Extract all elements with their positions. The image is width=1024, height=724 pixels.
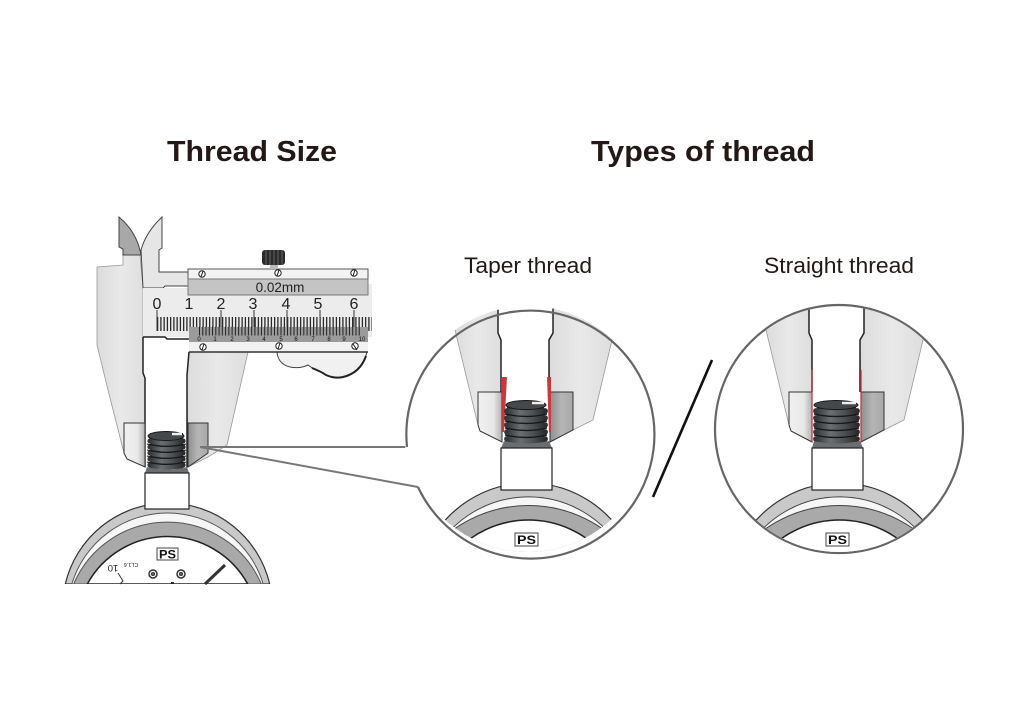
title: Types of thread: Types of thread <box>591 136 815 168</box>
slider bottom plate with vernier: 0 <box>197 337 201 343</box>
divider slash <box>653 360 712 497</box>
caliper upper right jaw <box>141 217 188 288</box>
jaw upper gray facet <box>119 217 141 255</box>
slider bottom plate with vernier: 7 <box>311 337 315 343</box>
straight view contents <box>756 308 924 552</box>
screws <box>199 270 358 350</box>
gauge dial text: 10 <box>108 562 118 573</box>
red straight lines <box>812 370 861 442</box>
blocks <box>789 392 812 442</box>
neck <box>501 448 552 490</box>
right jaw <box>860 305 923 430</box>
caliper sliding jaw <box>187 352 248 467</box>
gauge needles <box>205 565 225 584</box>
main scale numbers: 1 <box>185 296 194 313</box>
magnified view: straight thread <box>715 305 963 553</box>
gauge dial screws <box>149 570 185 578</box>
magnifier outline <box>406 311 654 559</box>
main scale numbers: 4 <box>282 296 291 313</box>
caliper fixed jaw <box>97 255 145 467</box>
main scale numbers: 0 <box>153 296 162 313</box>
slider bottom plate with vernier: 9 <box>342 337 346 343</box>
main scale number ticks <box>157 310 354 331</box>
right jaw <box>549 305 612 430</box>
gauge bands <box>756 485 922 552</box>
label: Straight thread: Straight thread <box>764 253 914 278</box>
main scale numbers: 2 <box>217 296 226 313</box>
slider bottom plate with vernier: 3 <box>246 337 250 343</box>
slider bottom plate with vernier <box>189 327 368 352</box>
taper view contents <box>444 308 612 552</box>
gauge neck <box>145 473 189 509</box>
main scale numbers <box>153 296 359 313</box>
fixed jaw lower edge lines <box>143 337 189 467</box>
left jaw <box>455 305 501 425</box>
logo: PS <box>517 533 536 547</box>
locking knob <box>262 250 285 269</box>
logo <box>826 533 849 547</box>
label: Taper thread: Taper thread <box>464 253 592 278</box>
thread <box>812 400 863 448</box>
thumb wheel <box>277 352 367 378</box>
thread <box>501 400 552 448</box>
gauge bands <box>444 485 612 552</box>
logo: PS <box>828 533 847 547</box>
caliper beam <box>143 284 372 337</box>
gauge logo <box>157 548 178 562</box>
slider bottom plate with vernier: 8 <box>327 337 331 343</box>
left jaw <box>766 305 812 425</box>
main scale numbers: 5 <box>314 296 323 313</box>
title: Thread Size: Thread Size <box>167 136 337 168</box>
logo <box>515 533 538 547</box>
slider bottom plate with vernier: 2 <box>230 337 234 343</box>
neck <box>812 448 863 490</box>
red taper <box>502 377 507 432</box>
slider bottom plate with vernier: 10 <box>359 337 366 343</box>
magnified view: taper thread <box>404 305 654 559</box>
main scale numbers: 3 <box>249 296 258 313</box>
main scale ticks <box>157 317 372 331</box>
pressure gauge <box>60 503 275 587</box>
blocks <box>478 392 502 442</box>
jaw blocks <box>124 423 145 467</box>
slider bottom plate with vernier: 4 <box>262 337 266 343</box>
slider bottom plate with vernier: 1 <box>213 337 217 343</box>
slider top plate <box>188 269 368 295</box>
connector lines from thread to magnified view <box>200 447 418 487</box>
threaded connector <box>145 432 189 473</box>
pressure gauge: CL1.6 <box>124 561 138 567</box>
main scale numbers: 6 <box>350 296 359 313</box>
vernier caliper illustration <box>60 217 372 587</box>
gauge logo: PS <box>159 550 176 562</box>
slider bottom plate with vernier: 6 <box>294 337 298 343</box>
slider top plate: 0.02mm <box>256 280 304 295</box>
slider bottom plate with vernier: 5 <box>279 337 283 343</box>
